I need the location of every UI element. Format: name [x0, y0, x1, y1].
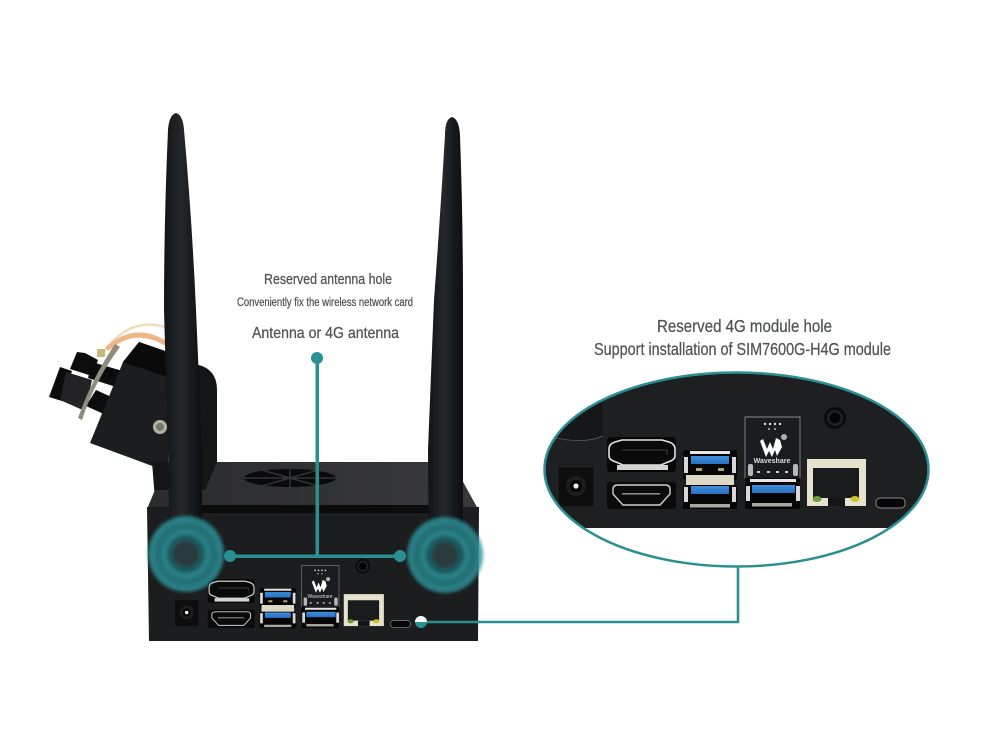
case top	[147, 462, 478, 509]
lenses	[49, 352, 126, 415]
right halo	[407, 517, 483, 593]
antenna connector lines	[224, 352, 406, 562]
left halo	[148, 516, 224, 592]
connector	[97, 349, 105, 357]
label: wireless network card note: Conveniently fix the wireless network card	[237, 297, 413, 309]
vent	[244, 468, 336, 488]
module label main: Waveshare	[307, 594, 333, 600]
heading: antenna hole	[237, 272, 413, 342]
mount plate	[190, 365, 217, 495]
right antenna	[428, 117, 463, 583]
camera board	[78, 344, 120, 420]
label: reserved 4G module hole: Reserved 4G module hole	[657, 316, 832, 336]
module label zoom: Waveshare	[754, 458, 790, 465]
camera assembly	[49, 325, 217, 500]
ribbon cable	[108, 325, 165, 348]
main ports	[174, 559, 410, 628]
screw	[153, 420, 167, 434]
bracket stem	[152, 462, 200, 500]
label: antenna or 4G antenna: Antenna or 4G antenna	[252, 325, 399, 342]
case front	[147, 507, 479, 641]
zoom ellipse	[540, 370, 940, 566]
heading: 4G module hole	[594, 316, 891, 359]
module callout line	[415, 566, 738, 628]
bracket box	[90, 342, 168, 467]
label: reserved antenna hole: Reserved antenna hole	[264, 272, 392, 288]
left antenna	[164, 113, 202, 583]
label: SIM7600G-H4G support: Support installation of SIM7600G-H4G module	[594, 339, 891, 359]
